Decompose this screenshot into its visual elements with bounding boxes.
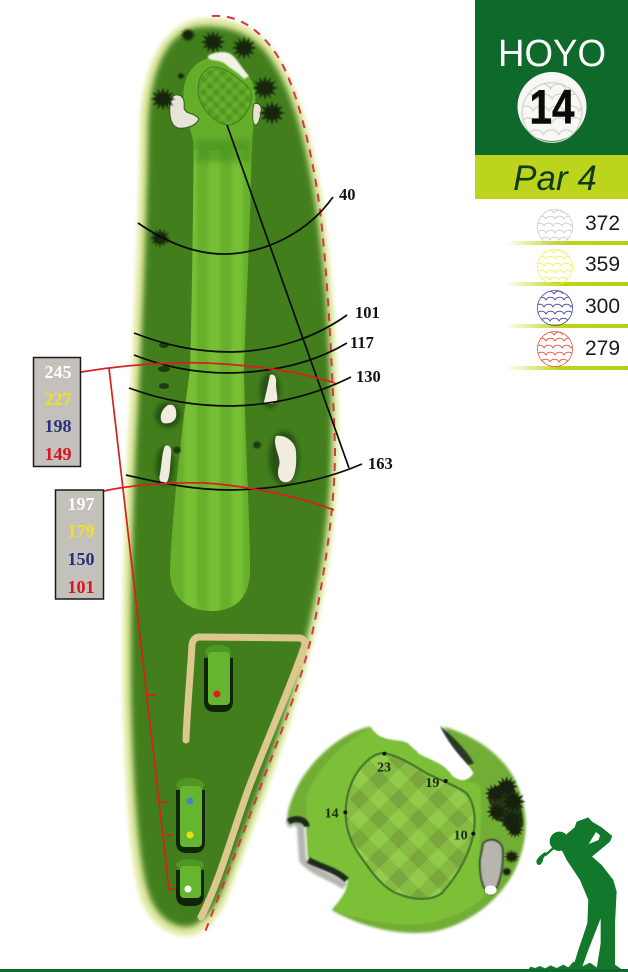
trees around green <box>150 28 285 248</box>
legend distances: 372 <box>585 212 620 235</box>
distance box 2: 101 <box>68 577 94 597</box>
pin positions: 23 <box>377 760 391 775</box>
tee: blue and yellow <box>176 778 205 853</box>
tee distance legend <box>505 209 628 370</box>
tee: red <box>204 645 233 712</box>
distance labels: 101 <box>355 303 380 322</box>
icon: golfer silhouette <box>528 817 622 969</box>
gap between arms <box>589 832 600 844</box>
out of bounds dashed line <box>205 16 335 932</box>
pin positions: 14 <box>325 807 339 822</box>
red layup arcs and measuring line <box>81 363 335 889</box>
distance box 1: 198 <box>44 416 72 436</box>
par text: Par 4 <box>513 159 597 198</box>
golfer body <box>562 817 617 968</box>
distance box 2: 197 <box>68 494 94 514</box>
blue tee ball <box>535 290 580 326</box>
yellow tee ball <box>535 249 580 285</box>
panel: hole header <box>475 0 628 199</box>
legend distances: 300 <box>585 295 620 318</box>
legend distances: 359 <box>585 253 620 276</box>
panel: hole course map <box>123 16 338 936</box>
bunker: behind green <box>208 52 249 79</box>
distance box 1: 149 <box>44 444 72 464</box>
putting green <box>346 753 475 899</box>
fairway bunkers <box>155 372 299 486</box>
green collar <box>183 57 255 150</box>
red tee ball <box>535 331 580 367</box>
bunker left <box>288 819 347 880</box>
chart: black distance arcs and centre line <box>126 125 362 490</box>
heading: hoyo: HOYO <box>498 33 606 75</box>
club shaft <box>545 829 575 855</box>
small shrubs on fairway edges <box>158 342 262 455</box>
distance box 1: 227 <box>44 389 72 409</box>
distance labels <box>339 185 393 473</box>
outer rough <box>287 727 526 933</box>
distance box 1: 245 <box>44 362 72 382</box>
bushes <box>485 776 525 876</box>
legend distances <box>585 212 620 360</box>
bunker shading left <box>287 822 345 887</box>
distance box 2: 179 <box>68 521 94 541</box>
distance box 2 <box>56 490 104 599</box>
club head <box>536 852 547 865</box>
legend distances: 279 <box>585 337 620 360</box>
grass tufts <box>528 962 622 969</box>
green surround <box>306 728 484 925</box>
distance labels: 163 <box>368 454 393 473</box>
pin positions: 19 <box>425 776 439 791</box>
panel: green detail inset <box>287 726 526 933</box>
pin positions: 10 <box>454 829 468 844</box>
white bunker notch <box>413 727 473 780</box>
fairway <box>170 120 252 611</box>
pin positions <box>325 752 475 844</box>
golfer head <box>550 832 569 851</box>
rough edge glow <box>123 18 338 936</box>
golf ball with hole number <box>518 72 594 142</box>
par band <box>475 155 628 199</box>
bottom green rule <box>0 969 628 972</box>
distance box 1 <box>34 358 80 466</box>
bunker: left of green <box>170 95 199 128</box>
rough <box>131 26 331 927</box>
putting green <box>198 67 252 125</box>
bunker: right of green <box>253 103 261 125</box>
bunker right <box>480 840 503 895</box>
distance labels: 117 <box>350 333 374 352</box>
fairway shadow band near green <box>196 140 250 162</box>
golf ball with hole number: 14 <box>530 82 575 134</box>
distance labels: 130 <box>356 367 381 386</box>
tee: white <box>176 859 204 906</box>
white tee ball <box>535 209 580 245</box>
distance labels: 40 <box>339 185 356 204</box>
legend rule lines <box>505 241 628 370</box>
bunker top <box>440 726 474 765</box>
distance box 2: 150 <box>68 549 94 569</box>
cart path <box>186 637 305 917</box>
